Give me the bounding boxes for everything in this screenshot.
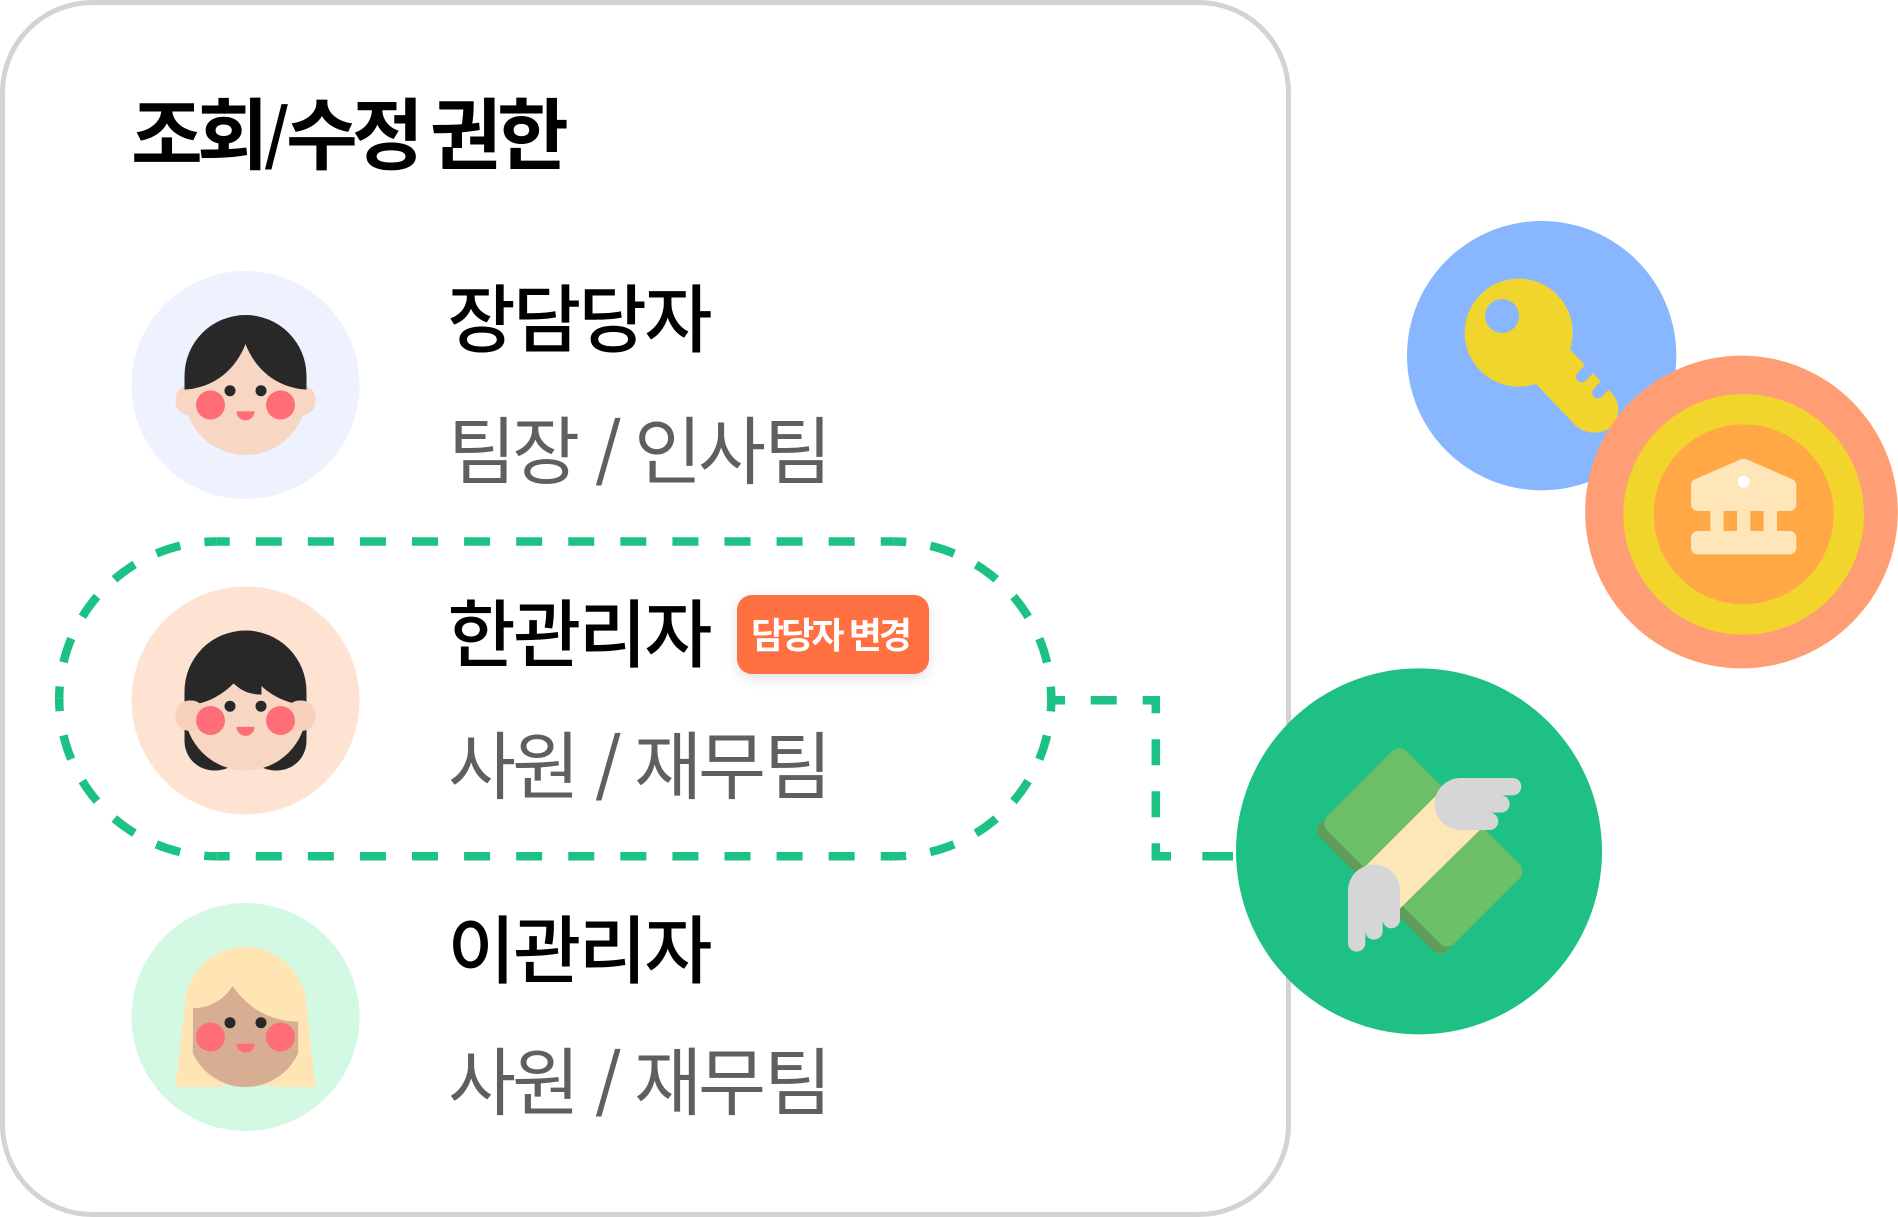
title: / [264,86,290,182]
text: 한관리자: 사원 [448,708,580,815]
badge: 담당자 변경 [737,595,929,674]
icon: money with wings [1236,668,1602,1034]
text: 장담당자: 장담당자 [448,261,712,368]
text: 한관리자: 재무팀 [634,708,832,815]
badge: 담당자 변경: 담당자 변경 [751,607,912,659]
text: 장담당자 [448,261,832,500]
title: 조회 [131,74,269,186]
text: 한관리자: / [595,713,622,813]
icon: key [1407,221,1676,490]
avatar: 한관리자 [132,586,360,814]
dashed connector [1051,700,1233,856]
text: 장담당자: 팀장 [448,393,580,500]
panel: permissions card [2,2,1288,1214]
text: 이관리자: 이관리자 [448,892,712,999]
avatar: 이관리자 [132,903,360,1131]
text: 이관리자 [448,892,832,1131]
text: 이관리자: 사원 [448,1024,580,1131]
text: 장담당자: / [595,398,622,498]
text: 이관리자: / [595,1029,622,1129]
avatar: 장담당자 [132,271,360,499]
text: 한관리자: 한관리자 [448,576,712,683]
text: 장담당자: 인사팀 [634,393,832,500]
text: 한관리자 [448,576,832,815]
title: 수정 권한 [286,74,569,186]
text: 이관리자: 재무팀 [634,1024,832,1131]
icon: bank coin [1585,356,1898,668]
dashed highlight around 한관리자 [59,542,1051,856]
